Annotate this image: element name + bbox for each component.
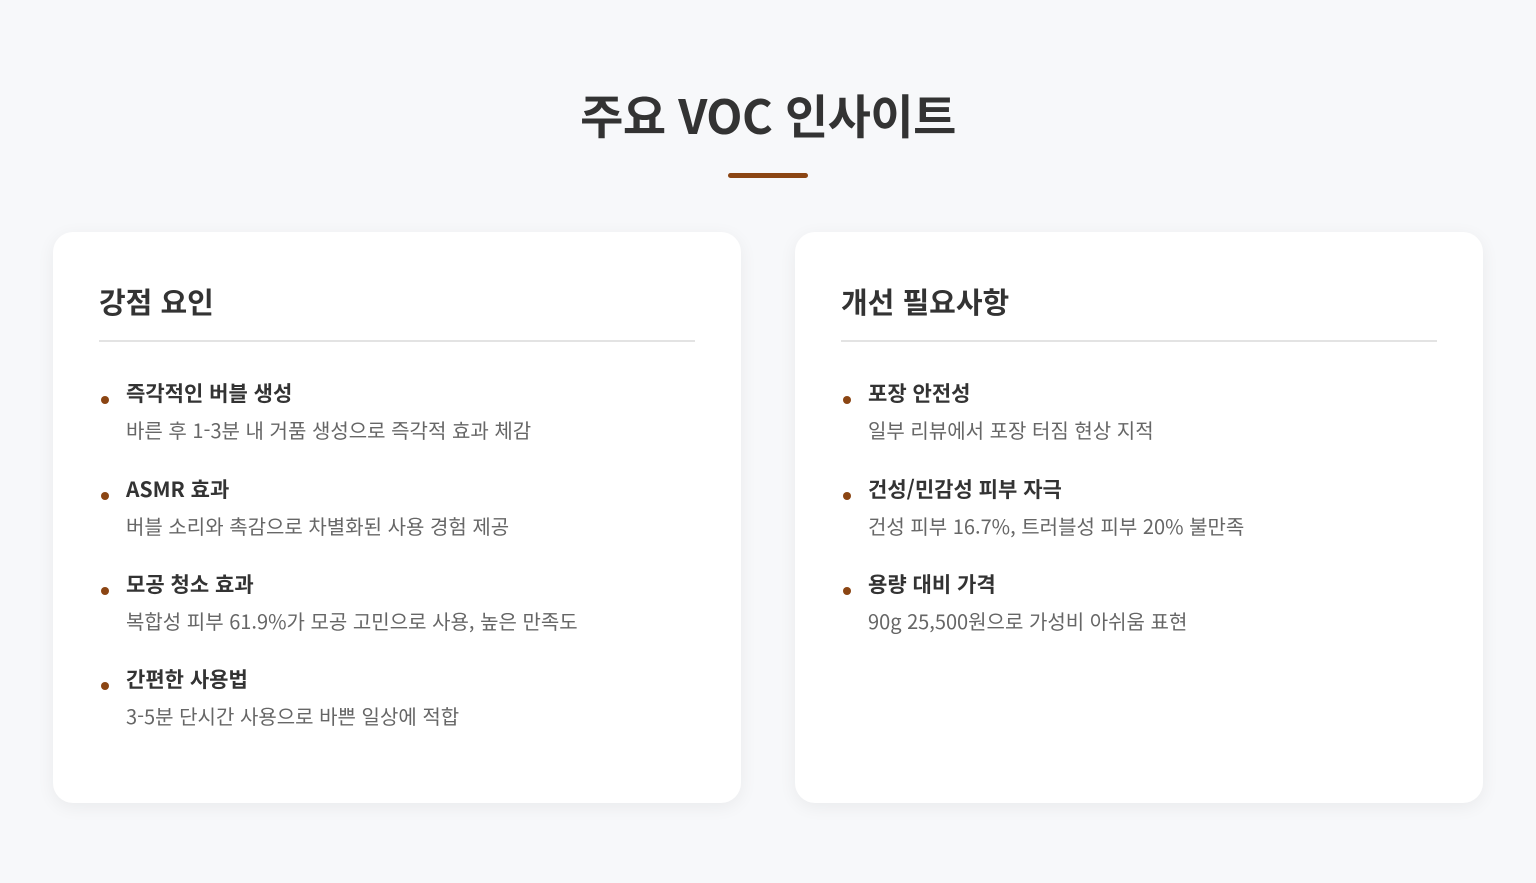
heading: improvements: 개선 필요사항 bbox=[841, 280, 1009, 322]
item: ASMR: 버블 소리와 촉감으로 차별화된 사용 경험 제공 bbox=[126, 511, 509, 540]
item: ASMR: ASMR 효과 bbox=[126, 474, 229, 504]
item: price: 용량 대비 가격 bbox=[868, 569, 996, 599]
item: price: 90g 25,500원으로 가성비 아쉬움 표현 bbox=[868, 606, 1187, 635]
item: pore cleansing: 복합성 피부 61.9%가 모공 고민으로 사용, 높은 만족도 bbox=[126, 606, 578, 635]
item: dry/sensitive skin: 건성 피부 16.7%, 트러블성 피부 20% 불만족 bbox=[868, 511, 1244, 540]
item: ASMR bbox=[101, 474, 509, 540]
item: instant bubble bbox=[101, 378, 531, 444]
item: price bbox=[843, 569, 1187, 635]
item: easy use: 간편한 사용법 bbox=[126, 664, 248, 694]
title underline accent bbox=[728, 173, 808, 178]
item: dry/sensitive skin: 건성/민감성 피부 자극 bbox=[868, 474, 1062, 504]
item: pore cleansing bbox=[101, 569, 578, 635]
panel: strengths bbox=[53, 232, 741, 803]
item: dry/sensitive skin bbox=[843, 474, 1244, 540]
item: instant bubble: 즉각적인 버블 생성 bbox=[126, 378, 292, 408]
item: pore cleansing: 모공 청소 효과 bbox=[126, 569, 254, 599]
heading: strengths: 강점 요인 bbox=[99, 280, 214, 322]
item: instant bubble: 바른 후 1-3분 내 거품 생성으로 즉각적 효과 체감 bbox=[126, 415, 531, 444]
title: 주요 VOC 인사이트 bbox=[580, 79, 956, 148]
item: packaging: 일부 리뷰에서 포장 터짐 현상 지적 bbox=[868, 415, 1154, 444]
item: easy use bbox=[101, 664, 459, 730]
item: packaging: 포장 안전성 bbox=[868, 378, 970, 408]
panel: improvements bbox=[795, 232, 1483, 803]
item: easy use: 3-5분 단시간 사용으로 바쁜 일상에 적합 bbox=[126, 701, 459, 730]
item: packaging bbox=[843, 378, 1154, 444]
